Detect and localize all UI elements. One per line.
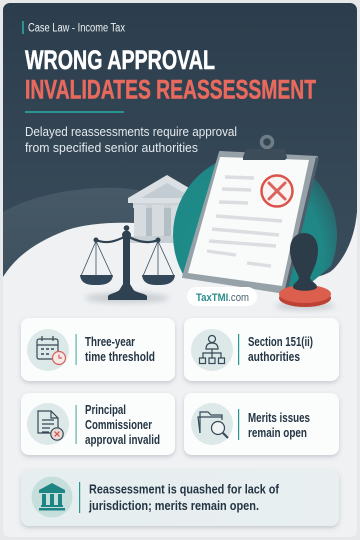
card: merits issues: Merits issues <box>248 411 310 425</box>
title: WRONG APPROVAL <box>25 45 215 75</box>
card: Principal Commissioner approval <box>21 393 175 455</box>
clipboard clip <box>243 136 287 160</box>
card: merits issues: remain open <box>248 426 307 440</box>
banner: conclusion: jurisdiction; merits remain open. <box>88 498 259 513</box>
TaxTMI pill: TaxTMI.com <box>196 292 249 304</box>
icon: scales of justice <box>80 225 175 303</box>
icon: red x seal <box>262 176 292 206</box>
tag: Case Law: Case Law - Income Tax <box>28 22 125 34</box>
icon: org chart <box>200 336 224 364</box>
card: three-year threshold: Three-year <box>85 335 135 349</box>
subtitle <box>25 124 237 155</box>
card: Section 151(ii): authorities <box>248 350 300 364</box>
card: Principal Commissioner approval: approval invalid <box>85 433 160 447</box>
teal circle behind clipboard <box>173 163 337 288</box>
header panel: dark background <box>3 3 357 282</box>
card: merits issues <box>184 393 339 455</box>
icon: clipboard with rejected document <box>183 136 319 294</box>
card: Section 151(ii) <box>184 318 339 381</box>
card: three-year threshold: time threshold <box>85 350 155 364</box>
subtitle: from specified senior authorities <box>25 140 198 155</box>
TaxTMI pill <box>187 287 257 306</box>
icon: calendar clock <box>37 336 66 364</box>
banner: conclusion <box>21 470 339 526</box>
card: Principal Commissioner approval: Commissioner <box>85 418 152 432</box>
icon: courthouse <box>128 175 208 243</box>
white hill <box>3 223 357 537</box>
title <box>25 45 316 104</box>
card: Section 151(ii): Section 151(ii) <box>248 335 313 349</box>
icon: bank <box>39 483 65 510</box>
icon: rubber stamp <box>275 233 335 310</box>
subtitle: Delayed reassessments require approval <box>25 124 237 139</box>
banner: conclusion: Reassessment is quashed for lack of <box>89 482 280 496</box>
icon: document rejected <box>38 411 63 440</box>
icon: folder with magnifier <box>198 412 228 438</box>
card: Principal Commissioner approval: Principal <box>85 403 126 417</box>
document text lines <box>207 177 282 266</box>
card: three-year threshold <box>21 318 175 381</box>
